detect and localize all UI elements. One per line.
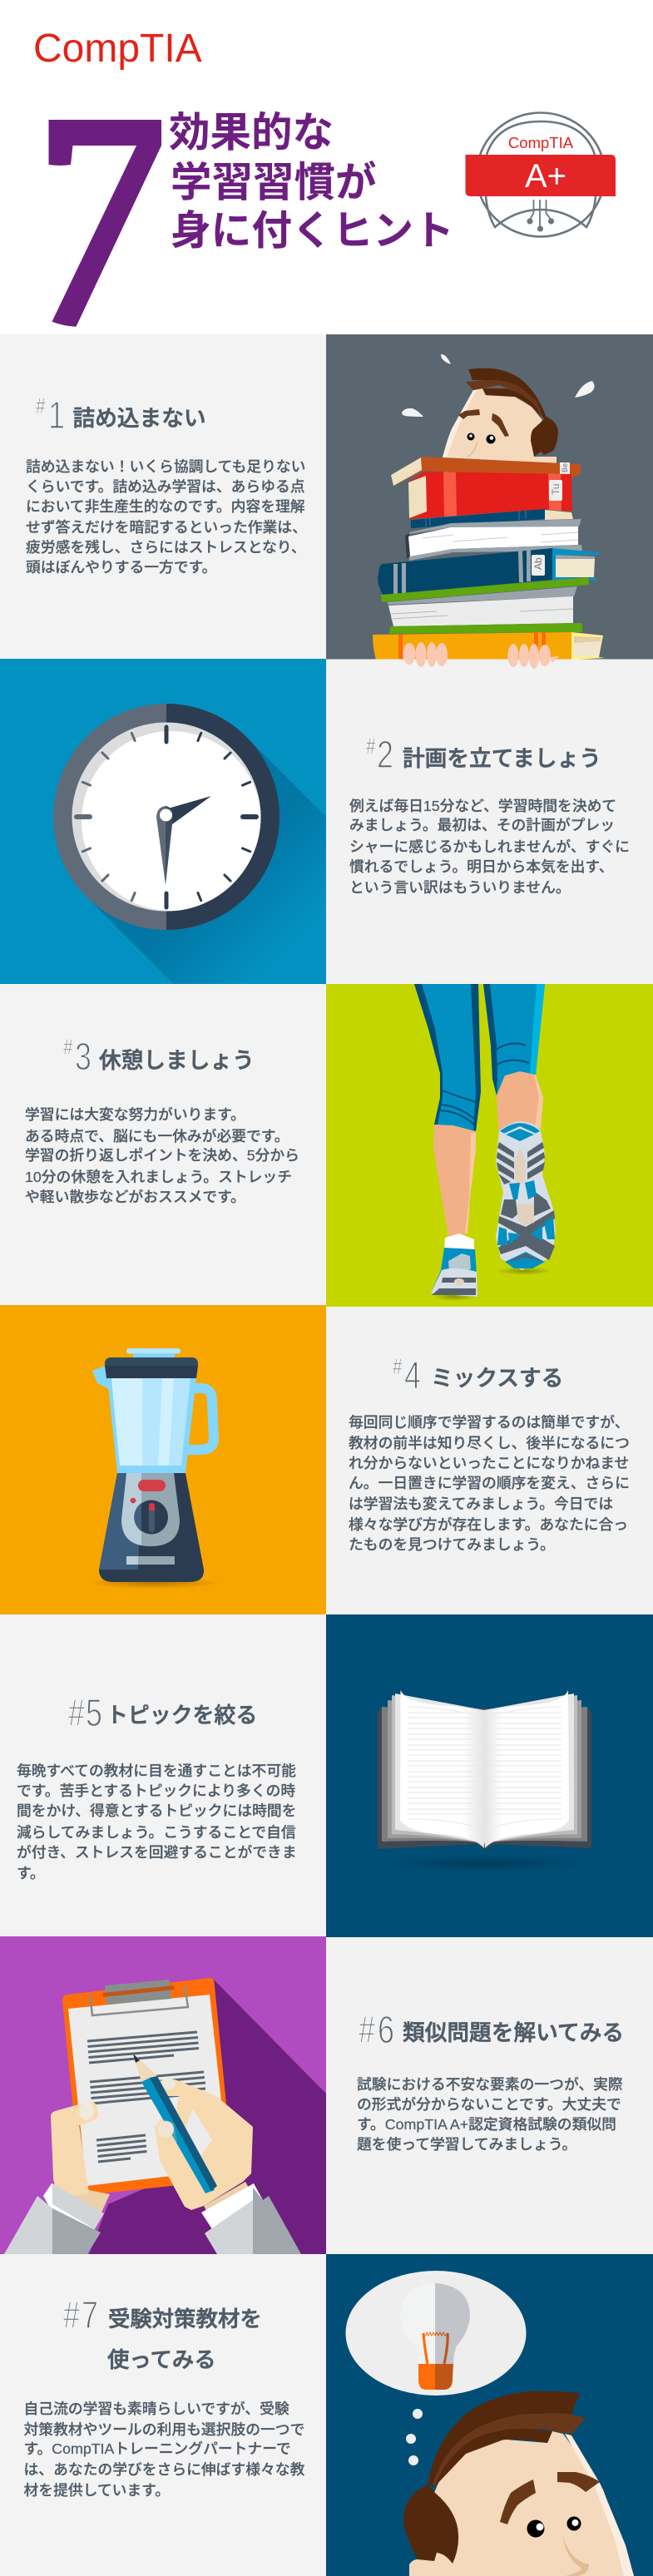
body text 4: れ分からないといったことになりかねませ [349, 1455, 629, 1471]
number 2 hash: # [366, 734, 376, 759]
body text 7: 対策教材やツールの利用も選択肢の一つで [23, 2421, 304, 2438]
number 4 hash: # [393, 1354, 403, 1379]
right leg [483, 984, 545, 1095]
sole [496, 1121, 556, 1270]
number 7 hash: # [63, 2293, 80, 2336]
heading 2: 計画を立てましょう [403, 746, 601, 771]
body text 1: せず答えだけを暗記するといった作業は、 [26, 519, 307, 536]
heading 3: 休憩しましょう [99, 1048, 255, 1073]
body text 4: は学習法も変えてみましょう。今日では [349, 1496, 613, 1512]
badge: CompTIA A+: A+ [525, 158, 566, 195]
number 6 hash: # [359, 2008, 375, 2051]
book: white pages [409, 519, 581, 534]
body text 5: 減らしてみましょう。こうすることで自信 [17, 1824, 296, 1841]
body text 5: す。 [17, 1865, 45, 1881]
body text 1: くらいです。詰め込み学習は、あらゆる点 [26, 478, 305, 495]
heading 7: 受験対策教材を [108, 2307, 262, 2331]
hands [403, 642, 559, 669]
illustration: worried man and book stack panel: Tu [550, 483, 561, 495]
body text 2: 例えば毎日15分など、学習時間を決めて [349, 798, 616, 814]
body text 7 [23, 2400, 304, 2499]
book: green [381, 577, 589, 602]
body text 2: みましょう。最初は、その計画がプレッ [349, 817, 615, 833]
right sleeve [201, 2183, 263, 2229]
title: 効果的な [169, 110, 334, 156]
body text 3: 10分の休憩を入れましょう。ストレッチ [25, 1169, 292, 1185]
number 6: 6 [378, 2008, 394, 2051]
body text 6: 題を使って学習してみましょう。 [357, 2136, 576, 2153]
illustration: clock panel [0, 659, 326, 984]
heading 4: ミックスする [431, 1366, 563, 1391]
big numeral 7 [48, 120, 161, 327]
book: red [409, 472, 572, 519]
panel: tip 2 text [326, 659, 653, 984]
body text 6: の形式が分からないことです。大丈夫で [357, 2096, 621, 2113]
heading 7 [107, 2307, 262, 2372]
body text 2: シャーに感じるかもしれませんが、すぐに [349, 838, 630, 855]
illustration: man with lightbulb panel [326, 2254, 653, 2576]
body text 5 [17, 1763, 297, 1881]
illustration: worried man and book stack panel: Ab [532, 557, 544, 570]
clipboard text lines [87, 2032, 205, 2162]
body text 4: 様々な学び方が存在します。あなたに合っ [349, 1516, 628, 1533]
number 3: 3 [75, 1035, 92, 1078]
clipboard board [62, 1978, 234, 2195]
number 1 hash: # [35, 393, 45, 418]
panel: tip 4 text [326, 1307, 653, 1614]
pencil [133, 2054, 157, 2082]
body text 3: ある時点で、脳にも一休みが必要です。 [25, 1128, 289, 1145]
body text 3: や軽い散歩などがおススメです。 [25, 1189, 245, 1205]
number 1: 1 [48, 393, 65, 437]
left sleeve [43, 2183, 95, 2237]
body text 7: 自己流の学習も素晴らしいですが、受験 [23, 2400, 289, 2417]
body text 7: は、あなたの学びをさらに伸ばす様々な教 [23, 2461, 304, 2478]
heading 7: 使ってみる [107, 2347, 216, 2372]
illustration: blender panel [0, 1305, 326, 1614]
book: brown [393, 457, 581, 486]
illustration: worried man and book stack panel: Be [561, 463, 569, 472]
badge: CompTIA A+ [466, 111, 616, 238]
body text 1: 疲労感を残し、さらにはストレスとなり、 [26, 539, 306, 556]
body text 1: 詰め込まない！いくら協調しても足りない [26, 458, 305, 475]
body text 6: 試験における不安な要素の一つが、実際 [357, 2076, 623, 2093]
illustration: legs panel [326, 984, 653, 1307]
title: 身に付くヒント [171, 209, 454, 254]
illustration: worried man and book stack panel [326, 334, 653, 669]
panel: tip 1 text [0, 334, 326, 659]
body text 6 [357, 2076, 623, 2153]
number 5 hash: # [68, 1691, 85, 1734]
body text 2: という言い訳はもういりません。 [349, 879, 571, 896]
man's head [409, 2431, 634, 2576]
body text 5: 毎晩すべての教材に目を通すことは不可能 [17, 1763, 296, 1779]
number 7: 7 [82, 2293, 98, 2336]
body text 6: す。CompTIA A+認定資格試験の類似問 [357, 2116, 616, 2133]
right hand [204, 2182, 250, 2217]
illustration: open book panel [326, 1614, 653, 1937]
body text 3 [25, 1106, 299, 1205]
body text 3: 学習には大変な努力がいります。 [25, 1106, 245, 1123]
panel: tip 6 text [326, 1937, 653, 2254]
badge: CompTIA A+: CompTIA [508, 134, 574, 151]
illustration: clipboard panel [0, 1936, 326, 2254]
body text 7: 材を提供しています。 [23, 2482, 170, 2499]
panel: tip 5 text [0, 1614, 326, 1936]
body text 1: において非生産生的なのです。内容を理解 [26, 498, 305, 515]
left hand [54, 2183, 110, 2213]
left leg pants colors [414, 984, 480, 1131]
body text 4: ん。一日置きに学習の順序を変え、さらに [349, 1475, 630, 1491]
heading 1: 詰め込まない [73, 406, 206, 431]
sweat drops [402, 354, 595, 417]
title [169, 110, 454, 254]
body text 4 [349, 1414, 630, 1553]
body text 2: 慣れるでしょう。明日から本気を出す、 [349, 858, 614, 875]
title: 学習習慣が [171, 160, 376, 205]
body text 4: 毎回同じ順序で学習するのは簡単ですが、 [349, 1414, 629, 1431]
lightbulb [400, 2283, 435, 2364]
body text 1: 頭はぼんやりする一方です。 [26, 559, 216, 576]
body text 5: 間をかけ、得意とするトピックには時間を [17, 1802, 296, 1819]
panel: tip 7 text [0, 2254, 326, 2576]
logo: CompTIA: CompTIA [33, 27, 202, 71]
panel: tip 3 text [0, 984, 326, 1305]
body text 5: が付き、ストレスを回避することができま [17, 1844, 297, 1861]
body text 3: 学習の折り返しポイントを決め、5分から [25, 1147, 299, 1164]
book: white thick [387, 586, 577, 605]
face and hair [443, 388, 557, 463]
body text 7: す。CompTIAトレーニングパートナーで [23, 2440, 291, 2457]
number 3 hash: # [63, 1035, 73, 1060]
heading 6: 類似問題を解いてみる [403, 2020, 624, 2045]
thought bubble [346, 2271, 526, 2396]
body text 4: たものを見つけてみましょう。 [349, 1536, 555, 1553]
book: dark blue [378, 548, 552, 595]
number 4: 4 [404, 1353, 421, 1397]
heading 5: トピックを絞る [106, 1704, 257, 1728]
number 2: 2 [377, 733, 393, 776]
body text 4: 教材の前半は知り尽くし、後半になるにつ [349, 1435, 630, 1451]
body text 1 [26, 458, 307, 576]
book: navy thin [411, 509, 545, 528]
body text 2 [349, 798, 630, 896]
body text 5: です。苦手とするトピックにより多くの時 [17, 1782, 295, 1799]
number 5: 5 [86, 1691, 102, 1734]
book: orange [373, 632, 571, 660]
